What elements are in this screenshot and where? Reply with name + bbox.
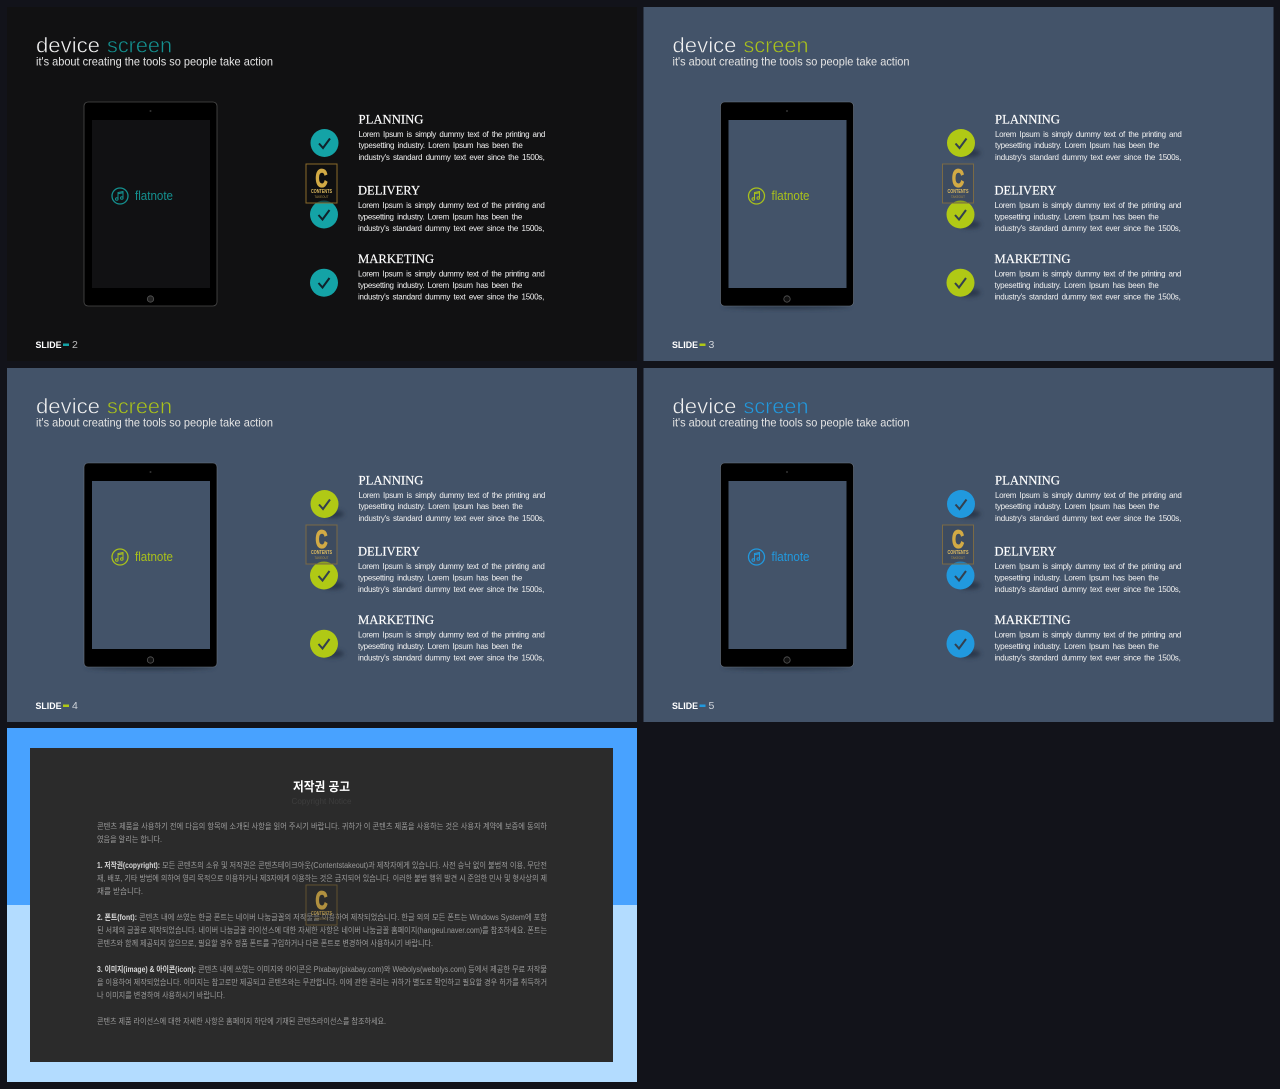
logo: flatnote: flatnote <box>135 189 173 203</box>
block: delivery: typesetting industry. Lorem Ipsum has been the <box>994 212 1159 222</box>
panel: slide 4 slate lime <box>7 368 637 722</box>
text block: font clause: 된 서체의 글꼴로 제작되었습니다. 네이버 나눔글꼴 라이선스에 대한 자세한 사항은 네이버 나눔글꼴 홈페이지(hangeul.naver.com)를 참조하세요. 폰트는 <box>97 925 547 935</box>
panel: copyright notice <box>7 728 637 1082</box>
text block: intro: 였음을 알리는 합니다. <box>97 834 162 844</box>
tablet device <box>84 463 217 670</box>
subtitle: copyright notice: Copyright Notice <box>292 797 352 806</box>
block: marketing: MARKETING <box>994 613 1070 627</box>
watermark badge: CONTENTS <box>948 550 969 556</box>
heading: copyright title: 저작권 공고 <box>293 779 350 794</box>
block: planning: PLANNING <box>358 474 424 488</box>
text block: font clause: 콘텐츠 내에 쓰였는 한글 폰트는 네이버 나눔글꼴의 저작물을 이용하여 제작되었습니다. 한글 외의 모든 폰트는 Windows System에 포함 <box>139 912 548 922</box>
watermark badge: C <box>316 165 328 193</box>
logo: flatnote <box>748 188 810 204</box>
block: delivery: industry's standard dummy text ever since the 1500s, <box>358 224 544 233</box>
logo: flatnote <box>112 549 173 565</box>
block: planning: Lorem Ipsum is simply dummy text of the printing and <box>358 491 545 500</box>
text block: copyright clause: 모든 콘텐츠의 소유 및 저작권은 콘텐츠테이크아웃(Contentstakeout)과 제작자에게 있습니다. 사전 승낙 없이 불법적 이용, 무단전 <box>162 860 547 870</box>
heading: device screen: device <box>672 395 736 419</box>
watermark badge: CONTENTS <box>311 550 333 556</box>
block: marketing: MARKETING <box>358 613 434 627</box>
block: delivery: DELIVERY <box>358 184 420 198</box>
icon: check planning <box>310 129 338 157</box>
text block: license note: 콘텐츠 제품 라이선스에 대한 자세한 사항은 홈페이지 하단에 기재된 콘텐츠라이선스를 참조하세요. <box>97 1016 386 1026</box>
block: marketing <box>994 252 1181 302</box>
heading: device screen: device <box>36 395 100 419</box>
block: delivery: industry's standard dummy text ever since the 1500s, <box>994 224 1181 233</box>
block: planning: industry's standard dummy text ever since the 1500s, <box>358 153 545 162</box>
subtitle: it's about creating the tools so people take action <box>36 416 273 430</box>
icon: check marketing <box>310 630 344 658</box>
block: marketing <box>358 252 544 302</box>
block: planning <box>995 474 1182 523</box>
slide number: 3 <box>708 339 714 351</box>
block: delivery: typesetting industry. Lorem Ipsum has been the <box>358 574 523 582</box>
block: marketing <box>994 613 1181 662</box>
text block: copyright clause: 1. 저작권(copyright): <box>97 860 160 870</box>
heading: device screen <box>36 34 172 58</box>
watermark badge: TAKEOUT <box>951 195 966 199</box>
block: planning: Lorem Ipsum is simply dummy text of the printing and <box>995 130 1182 139</box>
block: planning: typesetting industry. Lorem Ipsum has been the <box>995 141 1160 150</box>
subtitle: it's about creating the tools so people take action <box>36 54 273 68</box>
slide number: SLIDE <box>36 701 62 712</box>
text block: font clause <box>97 912 548 948</box>
block: delivery: industry's standard dummy text ever since the 1500s, <box>994 585 1181 594</box>
block: marketing: industry's standard dummy text ever since the 1500s, <box>358 654 544 662</box>
heading: device screen <box>672 395 808 419</box>
block: marketing: industry's standard dummy text ever since the 1500s, <box>994 292 1181 302</box>
slide number <box>36 700 78 712</box>
text block: copyright clause <box>97 860 547 896</box>
block: planning: industry's standard dummy text ever since the 1500s, <box>995 514 1181 523</box>
slide number <box>672 339 714 351</box>
icon: check marketing <box>946 269 980 297</box>
block: delivery: Lorem Ipsum is simply dummy text of the printing and <box>358 562 544 571</box>
block: planning: industry's standard dummy text ever since the 1500s, <box>995 153 1181 162</box>
block: marketing: Lorem Ipsum is simply dummy text of the printing and <box>358 270 544 278</box>
text block: font clause: 콘텐츠와 함께 제공되지 않으므로, 필요할 경우 정품 폰트를 구입하거나 다른 폰트로 변경하여 사용하시기 바랍니다. <box>97 938 433 948</box>
block: marketing: typesetting industry. Lorem Ipsum has been the <box>358 642 523 651</box>
block: planning <box>358 474 545 523</box>
heading: device screen: device <box>36 34 100 58</box>
watermark badge <box>306 164 337 203</box>
block: planning <box>358 112 545 162</box>
icon: check planning <box>947 490 980 518</box>
tablet device <box>720 102 854 309</box>
slide number: 2 <box>72 339 78 351</box>
text block: image clause: 콘텐츠 내에 쓰였는 이미지와 아이콘은 Pixabay(pixabay.com)와 Webolys(webolys.com) 등에서 제공한 무료 저작물 <box>198 964 547 974</box>
watermark badge: CONTENTS <box>948 189 969 195</box>
text block: image clause: 나 이미지를 변경하여 사용하시기 바랍니다. <box>97 990 225 1000</box>
block: marketing: MARKETING <box>994 252 1070 266</box>
block: marketing: MARKETING <box>358 252 434 266</box>
block: marketing: typesetting industry. Lorem Ipsum has been the <box>994 642 1159 651</box>
watermark badge: CONTENTS <box>311 189 333 195</box>
block: marketing: Lorem Ipsum is simply dummy text of the printing and <box>994 630 1181 640</box>
watermark badge: C <box>952 165 964 193</box>
block: delivery: Lorem Ipsum is simply dummy text of the printing and <box>994 562 1181 571</box>
text block: intro <box>97 821 548 844</box>
watermark badge: C <box>952 526 964 554</box>
block: marketing: typesetting industry. Lorem Ipsum has been the <box>358 281 523 290</box>
slide number: 4 <box>72 700 78 712</box>
watermark badge <box>942 164 974 203</box>
block: delivery: typesetting industry. Lorem Ipsum has been the <box>358 212 523 222</box>
block: delivery: Lorem Ipsum is simply dummy text of the printing and <box>358 201 544 210</box>
block: marketing: industry's standard dummy text ever since the 1500s, <box>994 654 1181 662</box>
slide number <box>672 700 714 712</box>
block: planning: Lorem Ipsum is simply dummy text of the printing and <box>995 491 1182 500</box>
watermark badge: TAKEOUT <box>314 556 329 560</box>
heading: device screen: screen <box>107 395 172 419</box>
icon: check planning <box>947 129 980 157</box>
heading: device screen: screen <box>107 34 172 58</box>
icon: check delivery <box>946 562 980 590</box>
heading: device screen <box>36 395 172 419</box>
block: delivery: industry's standard dummy text ever since the 1500s, <box>358 585 544 594</box>
watermark badge: TAKEOUT <box>314 195 329 199</box>
block: marketing: typesetting industry. Lorem Ipsum has been the <box>994 281 1159 290</box>
block: planning: PLANNING <box>995 474 1060 488</box>
block: planning: PLANNING <box>995 112 1060 126</box>
block: planning <box>995 112 1182 162</box>
block: marketing: Lorem Ipsum is simply dummy text of the printing and <box>994 270 1181 278</box>
block: planning: Lorem Ipsum is simply dummy text of the printing and <box>358 130 545 139</box>
watermark badge: C <box>316 887 328 915</box>
text block: image clause: 3. 이미지(image) & 아이콘(icon): <box>97 964 196 974</box>
block: planning: typesetting industry. Lorem Ipsum has been the <box>358 141 523 150</box>
watermark badge: CONTENTS <box>311 911 333 917</box>
text block: image clause <box>97 964 547 1000</box>
slide number: SLIDE <box>36 340 62 351</box>
tablet device <box>84 102 217 306</box>
watermark badge <box>306 525 337 564</box>
block: delivery <box>994 544 1181 594</box>
block: delivery <box>358 544 544 594</box>
heading: device screen: device <box>672 34 736 58</box>
icon: check delivery <box>946 200 980 228</box>
slide number: 5 <box>708 700 714 712</box>
panel: slide 5 slate blue <box>644 368 1274 722</box>
icon: check delivery <box>310 200 338 228</box>
panel: slide 3 slate lime <box>644 7 1274 361</box>
slide number: SLIDE <box>672 340 698 351</box>
block: delivery: Lorem Ipsum is simply dummy text of the printing and <box>994 201 1181 210</box>
block: delivery: DELIVERY <box>994 184 1056 198</box>
text block: font clause: 2. 폰트(font): <box>97 913 137 922</box>
heading: device screen: screen <box>744 34 808 58</box>
tablet device <box>720 463 854 670</box>
watermark badge <box>942 525 974 564</box>
block: delivery: DELIVERY <box>358 544 420 558</box>
icon: check marketing <box>946 630 980 658</box>
block: marketing: industry's standard dummy text ever since the 1500s, <box>358 292 544 302</box>
text block: copyright clause: 재, 배포, 기타 방법에 의하여 영리 목적으로 이용하거나 제3자에게 이용하는 것은 금지되어 있습니다. 이러한 불법 행위 발견 시 준엄한 민사 및 형사상의 제 <box>97 873 547 883</box>
icon: check marketing <box>310 269 338 297</box>
subtitle: it's about creating the tools so people take action <box>672 54 910 68</box>
block: delivery: typesetting industry. Lorem Ipsum has been the <box>994 574 1159 582</box>
block: planning: PLANNING <box>358 112 424 126</box>
block: delivery: DELIVERY <box>994 544 1056 558</box>
watermark badge: TAKEOUT <box>314 917 329 921</box>
text block: intro: 콘텐츠 제품을 사용하기 전에 다음의 항목에 소개된 사항을 읽어 주시기 바랍니다. 귀하가 이 콘텐츠 제품을 사용하는 것은 사용자 계약에 보증에 동의하 <box>97 821 548 831</box>
logo: flatnote: flatnote <box>135 550 173 564</box>
text block: copyright clause: 재를 받습니다. <box>97 886 143 896</box>
block: planning: typesetting industry. Lorem Ipsum has been the <box>358 502 523 511</box>
block: planning: typesetting industry. Lorem Ipsum has been the <box>995 502 1160 511</box>
watermark badge: C <box>316 526 328 554</box>
block: marketing: Lorem Ipsum is simply dummy text of the printing and <box>358 630 544 640</box>
block: delivery <box>994 184 1181 233</box>
icon: check planning <box>310 490 344 518</box>
panel: slide 2 dark teal <box>7 7 637 361</box>
heading: device screen: screen <box>744 395 808 419</box>
logo: flatnote <box>112 188 173 204</box>
watermark badge: TAKEOUT <box>951 556 966 560</box>
block: delivery <box>358 184 544 233</box>
text block: image clause: 을 이용하여 제작되었습니다. 이미지는 참고로만 제공되고 콘텐츠와는 무관합니다. 이에 관한 권리는 귀하가 별도로 확인하고 필요할 경우 허가를 취득하거 <box>97 977 547 987</box>
logo: flatnote: flatnote <box>772 550 810 564</box>
logo: flatnote: flatnote <box>772 189 810 203</box>
icon: check delivery <box>310 562 344 590</box>
block: marketing <box>358 613 544 662</box>
slide number: SLIDE <box>672 701 698 712</box>
logo: flatnote <box>748 549 810 565</box>
watermark badge <box>306 885 337 925</box>
subtitle: it's about creating the tools so people take action <box>672 416 910 430</box>
block: planning: industry's standard dummy text ever since the 1500s, <box>358 514 545 523</box>
slide number <box>36 339 78 351</box>
heading: device screen <box>672 34 808 58</box>
